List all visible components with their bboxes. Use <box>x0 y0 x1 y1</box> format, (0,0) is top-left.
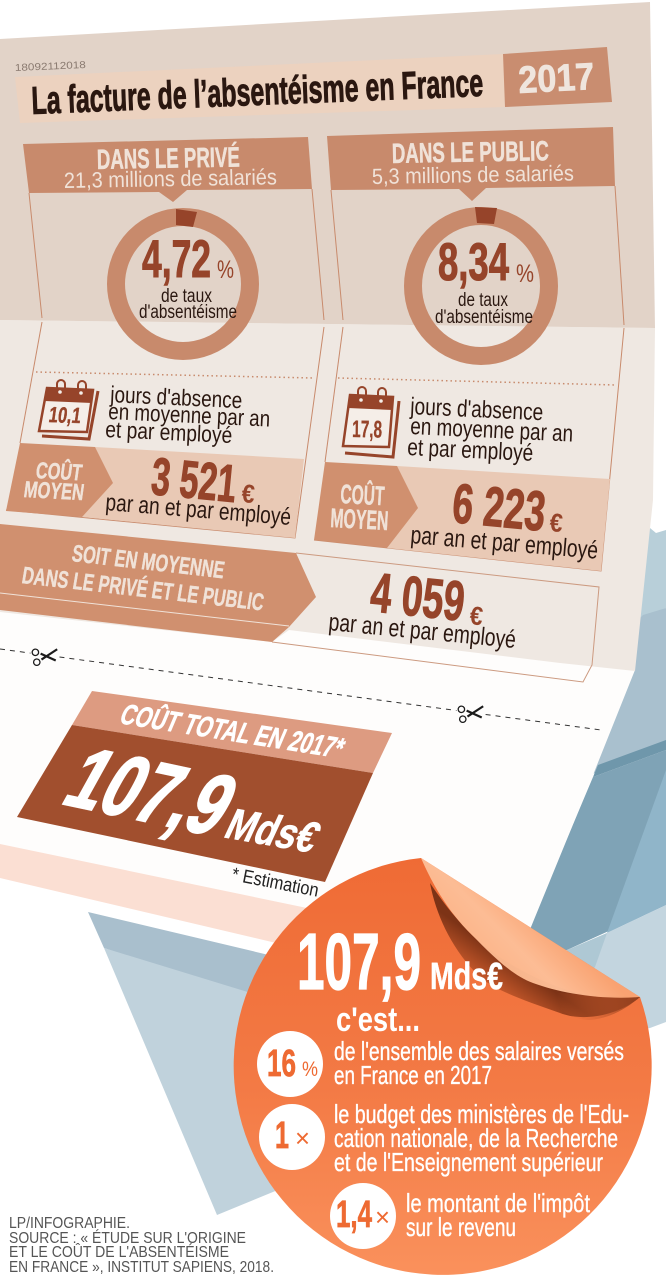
panel: coût moyen privé: € <box>240 478 256 509</box>
stat: 1,4 × <box>330 1183 591 1249</box>
source credit: EN FRANCE », INSTITUT SAPIENS, 2018. <box>9 1259 274 1276</box>
ring: public: de taux <box>458 290 508 311</box>
icon: calendar 10,1: 10,1 <box>47 402 83 428</box>
icon: scissors left <box>30 646 60 666</box>
sticker headline: 107,9 <box>297 917 421 1006</box>
panel: coût moyen public: MOYEN <box>330 503 389 536</box>
reference code: 18092112018 <box>15 60 87 74</box>
panel: coût moyen privé: 3 521 <box>149 447 239 514</box>
stat: 1,4 ×: sur le revenu <box>406 1212 516 1242</box>
heading: dans le public: DANS LE PUBLIC <box>392 135 549 169</box>
icon: calendar 17,8 <box>343 387 399 457</box>
panel: coût moyen public <box>314 462 610 571</box>
year box <box>503 47 612 107</box>
stat: 1,4 ×: 1,4 <box>336 1194 372 1236</box>
panel: coût moyen public: 6 223 <box>450 471 548 543</box>
stat: 16 %: % <box>302 1058 318 1081</box>
panel: moyenne privé et public: 4 059 <box>368 560 468 633</box>
sticker: orange peel <box>234 858 652 1275</box>
stat: 1 ×: 1 <box>275 1115 289 1157</box>
panel: coût moyen public: € <box>548 507 564 538</box>
stat: 1,4 ×: le montant de l'impôt <box>406 1188 591 1218</box>
ring: privé: % <box>217 256 234 284</box>
text: jours d'absence public <box>407 393 574 467</box>
ring: privé: de taux <box>161 286 212 307</box>
stat: 1 × <box>259 1099 629 1177</box>
paper: pale salmon strip <box>0 844 340 962</box>
arrow: moyenne <box>0 524 316 642</box>
text: jours d'absence public: en moyenne par an <box>410 413 574 448</box>
sticker headline: Mds€ <box>430 956 503 998</box>
panel: moyenne privé et public: SOIT EN MOYENNE <box>70 540 226 584</box>
panel: moyenne privé et public: par an et par employé <box>327 608 517 654</box>
text: jours d'absence privé: et par employé <box>105 416 233 448</box>
heading: dans le privé <box>23 137 312 202</box>
flap: peeled corner <box>421 858 640 998</box>
heading: dans le privé: 21,3 millions de salariés <box>64 164 277 193</box>
panel: coût moyen privé <box>6 443 304 538</box>
panel: coût total: COÛT TOTAL EN 2017* <box>115 698 350 765</box>
text: jours d'absence privé: en moyenne par an <box>108 398 271 432</box>
ring: privé: d'absentéisme <box>139 302 237 323</box>
panel: moyenne privé et public: € <box>468 600 484 631</box>
panel: coût moyen public: par an et par employé <box>409 521 599 565</box>
ring: privé: 4,72 <box>142 230 211 289</box>
text: jours d'absence public: jours d'absence <box>409 393 544 426</box>
ring: public <box>413 207 549 356</box>
panel: coût total: 107,9 <box>49 731 254 854</box>
panel: moyenne privé et public: DANS LE PRIVÉ ET LE PUBLIC <box>20 561 266 616</box>
blue background shapes right <box>520 528 666 1040</box>
text: jours d'absence privé: jours d'absence <box>109 381 243 413</box>
stat: 16 %: en France en 2017 <box>334 1060 492 1090</box>
arrow: coût moyen public <box>314 462 418 548</box>
stat: 16 %: 16 <box>267 1043 296 1085</box>
source credit: LP/INFOGRAPHIE. <box>9 1215 130 1232</box>
panel: moyenne privé et public <box>0 524 599 682</box>
ring: privé <box>116 209 250 351</box>
text: jours d'absence privé <box>105 381 271 448</box>
title band <box>15 54 505 123</box>
stat: 16 % <box>257 1031 624 1097</box>
panel: privé outlines <box>6 189 324 538</box>
ring: public: % <box>516 260 534 288</box>
panel: coût moyen privé: COÛT <box>34 456 84 485</box>
icon: calendar 10,1 <box>39 380 98 439</box>
blue background shapes left <box>88 912 290 1215</box>
heading: dans le public: 5,3 millions de salariés <box>372 160 574 189</box>
source credit: ET LE COÛT DE L'ABSENTÉISME <box>9 1242 229 1261</box>
paper: beige middle section <box>0 320 655 671</box>
year box: 2017 <box>517 56 595 102</box>
ring: public: d'absentéisme <box>435 307 533 328</box>
stat: 1,4 ×: × <box>375 1202 390 1232</box>
icon: scissors right <box>456 703 486 723</box>
arrow: coût moyen privé <box>6 443 113 517</box>
sticker headline: c'est... <box>336 1001 420 1039</box>
panel: public outlines <box>314 186 624 571</box>
heading: dans le privé: DANS LE PRIVÉ <box>97 142 240 175</box>
ring: public: 8,34 <box>438 233 509 292</box>
panel: coût moyen privé: MOYEN <box>22 476 86 505</box>
source credit: SOURCE : « ÉTUDE SUR L'ORIGINE <box>9 1228 246 1247</box>
panel: coût total <box>17 691 392 882</box>
paper: white lower section <box>0 600 635 1000</box>
stat: 1 ×: × <box>295 1123 310 1153</box>
note: estimation: * Estimation <box>230 864 320 902</box>
panel: coût moyen public: COÛT <box>340 478 386 511</box>
heading: dans le public <box>327 127 615 201</box>
paper: tan upper section <box>0 2 655 328</box>
source credit <box>9 1215 274 1276</box>
panel: coût total: Mds€ <box>218 800 328 862</box>
icon: calendar 17,8: 17,8 <box>352 416 382 444</box>
panel: coût moyen privé: par an et par employé <box>105 489 292 531</box>
text: jours d'absence public: et par employé <box>407 434 534 467</box>
